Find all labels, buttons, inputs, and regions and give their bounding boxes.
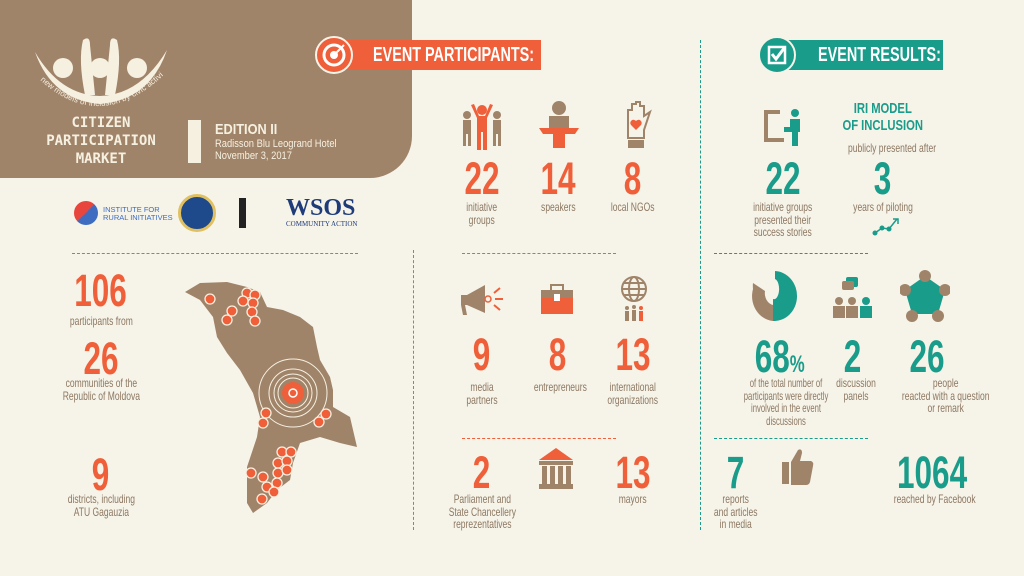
icon: group (463, 104, 501, 150)
participants row 2: 13 (615, 329, 651, 380)
results row 3: reports (723, 492, 749, 506)
icon: discussion panel (833, 277, 872, 318)
results row 1: initiative groups (753, 200, 813, 214)
participants row 2: international (610, 380, 656, 394)
participants row 3: mayors (619, 492, 647, 506)
results row 2: people (933, 376, 959, 390)
title: citizen participation market (46, 115, 156, 167)
participants row 3: reprezentatives (453, 517, 512, 531)
icon: target (315, 36, 353, 74)
participants row 3: 13 (615, 447, 651, 498)
logo: lighthouse (239, 198, 246, 228)
participants row 2: organizations (608, 392, 658, 406)
edition text: Radisson Blu Leogrand Hotel (215, 138, 337, 150)
results row 2: discussion (836, 376, 876, 390)
text: IRI model: IRI MODEL (854, 100, 912, 117)
logo: IRI (74, 201, 98, 225)
header: event participants (315, 36, 541, 74)
icon: institution (539, 448, 573, 489)
partner logos (74, 194, 358, 232)
results row 1: presented their (755, 212, 811, 226)
results row 1 (753, 100, 936, 239)
title: citizen participation market: MARKET (76, 151, 126, 167)
participants row 3 (449, 447, 651, 531)
participants row 2: partners (466, 392, 498, 406)
results row 2 (744, 270, 990, 428)
left stats: districts, including (67, 492, 135, 506)
edition text: EDITION II (215, 121, 277, 138)
results row 3: reached by Facebook (894, 492, 976, 506)
results row 1: publicly presented after (848, 141, 936, 155)
participants row 3: State Chancellery (449, 504, 516, 518)
logo: seal (178, 194, 216, 232)
participants row 1: 22 (464, 153, 500, 204)
icon: megaphone (461, 285, 503, 315)
results row 2: 26 (909, 331, 945, 382)
icon: globe with people (621, 276, 647, 321)
title: citizen participation market: PARTICIPATION (46, 133, 156, 149)
left stats: 26 (83, 333, 119, 384)
icon: checkbox (758, 36, 796, 74)
participants row 3: Parliament and (454, 492, 511, 506)
left stats: communities of the (65, 376, 137, 390)
left stats: 9 (92, 449, 110, 500)
results row 1: 3 (874, 153, 892, 204)
results row 2: discussions (766, 414, 806, 428)
header: event results: EVENT RESULTS: (818, 44, 941, 66)
results row 3: 7 (727, 447, 745, 498)
results row 2: reacted with a question (902, 388, 990, 402)
left stats (62, 265, 140, 518)
header panel (0, 0, 412, 178)
edition bar (188, 120, 201, 163)
participants row 2: media (470, 380, 494, 394)
icon: pie chart (752, 271, 797, 321)
left stats: participants from (70, 314, 132, 328)
participants row 1: local NGOs (611, 200, 655, 214)
icon: thumbs up (782, 449, 814, 485)
left stats: ATU Gagauzia (73, 504, 129, 518)
results row 2: panels (843, 388, 869, 402)
participants row 2: 9 (473, 329, 491, 380)
results row 3: in media (720, 517, 752, 531)
edition text: November 3, 2017 (215, 150, 292, 162)
participants row 1 (463, 101, 655, 226)
results row 1: success stories (754, 225, 812, 239)
participants row 1: initiative (467, 200, 497, 214)
participants row 1: 8 (624, 153, 642, 204)
results row 1: years of piloting (853, 200, 913, 214)
dividers (700, 40, 701, 530)
results row 3 (714, 447, 976, 531)
logo (35, 38, 167, 106)
left stats: 106 (75, 265, 127, 316)
text: IRI model (843, 100, 923, 134)
participants row 3: 2 (473, 447, 491, 498)
edition text (215, 121, 337, 162)
participants row 1: groups (469, 212, 495, 226)
title: citizen participation market: CITIZEN (71, 115, 130, 131)
results row 2: of the total number of (750, 376, 822, 390)
icon: round table (900, 270, 950, 322)
partner logos: INSTITUTE FOR (103, 205, 160, 214)
participants row 1: 14 (540, 153, 576, 204)
partner logos: RURAL INITIATIVES (103, 213, 173, 222)
participants row 2: 8 (549, 329, 567, 380)
participants row 1: speakers (541, 200, 575, 214)
logo: WSOS: WSOS (286, 195, 355, 221)
results row 2: or remark (927, 401, 964, 415)
icon: presenter (764, 109, 800, 146)
icon: speaker (539, 101, 579, 148)
left stats: Republic of Moldova (62, 388, 140, 402)
header: event results (760, 38, 943, 72)
results row 2: involved in the event (751, 401, 821, 415)
header: event participants: EVENT PARTICIPANTS: (373, 44, 534, 66)
participants row 2 (461, 276, 658, 406)
partner logos: COMMUNITY ACTION (286, 220, 358, 228)
results row 1: 22 (765, 153, 801, 204)
icon: briefcase (541, 284, 573, 314)
results row 3: and articles (714, 504, 758, 518)
results row 2: 2 (844, 331, 862, 382)
participants row 2: entrepreneurs (534, 380, 587, 394)
text: IRI model: OF INCLUSION (843, 117, 923, 134)
icon: hand with heart (627, 101, 652, 148)
results row 2: 68% (755, 331, 805, 382)
icon: trend line (872, 218, 899, 236)
results row 3: 1064 (897, 447, 967, 498)
results row 2: participants were directly (744, 388, 828, 402)
map of Moldova (185, 282, 357, 513)
